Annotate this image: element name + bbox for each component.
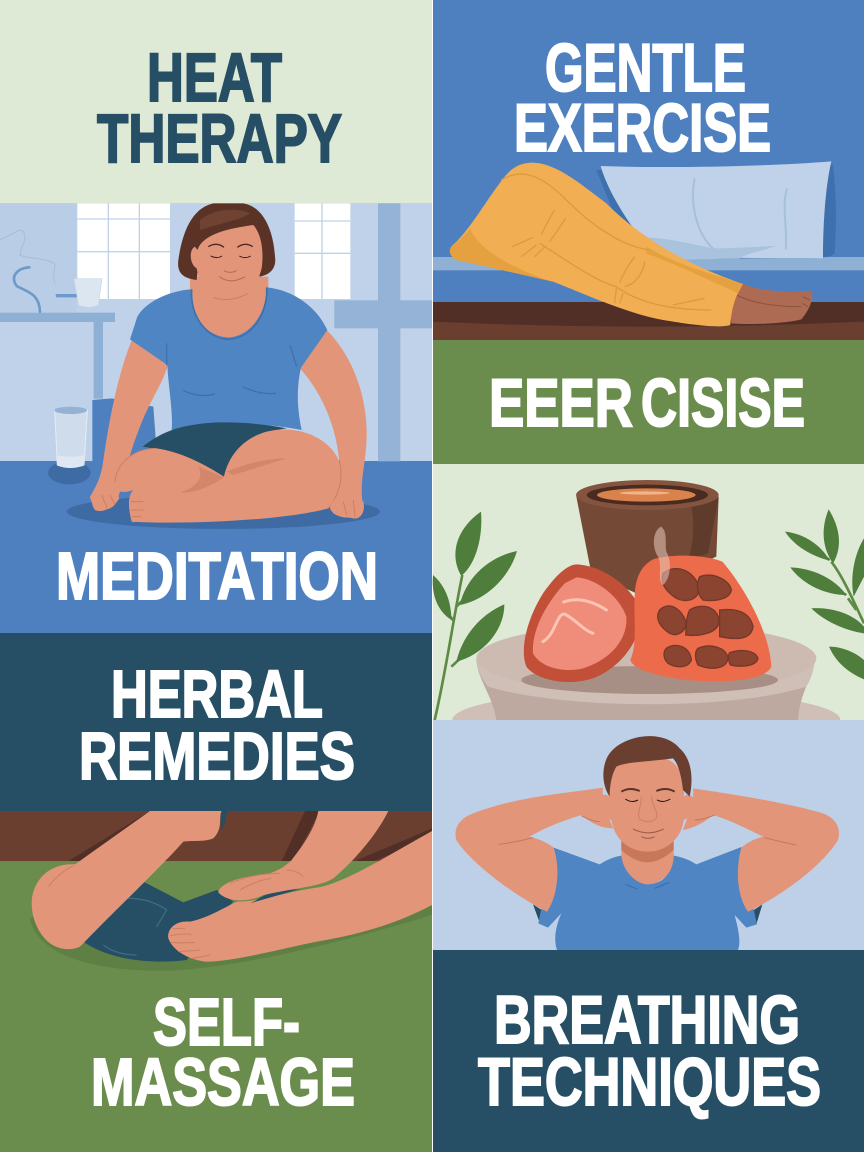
heading: self-massage: SELF- [153,985,300,1060]
panel: breathing scene [433,720,864,950]
heading: herbal remedies: HERBAL [111,657,323,732]
heading: herbal remedies [79,657,355,794]
face [601,755,695,852]
illustration: herbal cup and compresses [433,480,864,750]
panel: herbal remedies scene [433,464,864,750]
steam and stem on table [0,230,77,312]
t-shirt [538,847,757,950]
panel: gentle exercise scene [433,0,864,340]
window frame cross [334,203,432,461]
arms [455,788,613,912]
forearm and hand [218,811,388,900]
panel: heat therapy heading block [0,0,432,204]
panel: breathing techniques heading [433,950,864,1152]
heading: gentle exercise: EXERCISE [514,90,771,166]
right herb sprig [785,509,864,679]
steam wisp [654,527,670,585]
blue cushion [92,398,157,461]
arms [90,337,168,510]
panel: self-massage scene [0,811,432,1152]
mat shadow [67,494,380,529]
table [0,313,115,399]
yellow trousers [450,163,743,326]
heading: eeer cisise: EEER [489,365,633,441]
heading: meditation: MEDITATION [56,539,378,614]
stone pedestal [452,623,840,750]
heading: eeer cisise: CISISE [641,365,805,441]
heading: eeer cisise [489,365,805,441]
bent thigh [32,811,222,949]
left herb sprig [433,512,517,720]
foot [731,283,812,324]
heading: heat therapy [97,39,342,177]
illustration: man with hands behind head [455,736,839,950]
shorts [83,882,233,962]
feet and hands [129,488,170,523]
heading: herbal remedies: REMEDIES [79,719,355,794]
clay cup [576,480,719,593]
cut compress [524,564,641,682]
window: right [295,203,350,299]
heading: gentle exercise: GENTLE [545,30,746,106]
heading: self-massage: MASSAGE [91,1045,355,1120]
t-shirt [130,287,327,430]
face [191,225,262,299]
lower leg and foot [168,831,432,962]
hair [178,203,275,280]
neck [621,835,674,888]
sleeves [533,904,762,924]
panel: herbal remedies heading [0,633,432,811]
heading: heat therapy: THERAPY [97,100,342,177]
hair [603,736,692,797]
cup on table [74,279,102,307]
shorts [143,422,287,477]
heading: self-massage [91,985,355,1120]
cloth pouch with herbs [630,556,771,681]
heading: gentle exercise [514,30,771,166]
neck and chest skin [190,277,268,342]
panel: meditation scene [0,203,432,633]
floor glass [48,407,91,484]
pillow [596,161,836,260]
heading: heat therapy: HEAT [147,39,282,116]
panel: green band with caption [433,340,864,464]
illustration: hands massaging leg [30,811,432,971]
illustration: leg resting on pillow [433,161,864,340]
heading: breathing techniques [478,982,821,1120]
window: left [77,203,170,299]
illustration: meditating woman in room [0,203,432,529]
crossed legs [115,430,342,523]
facial features [621,789,675,792]
